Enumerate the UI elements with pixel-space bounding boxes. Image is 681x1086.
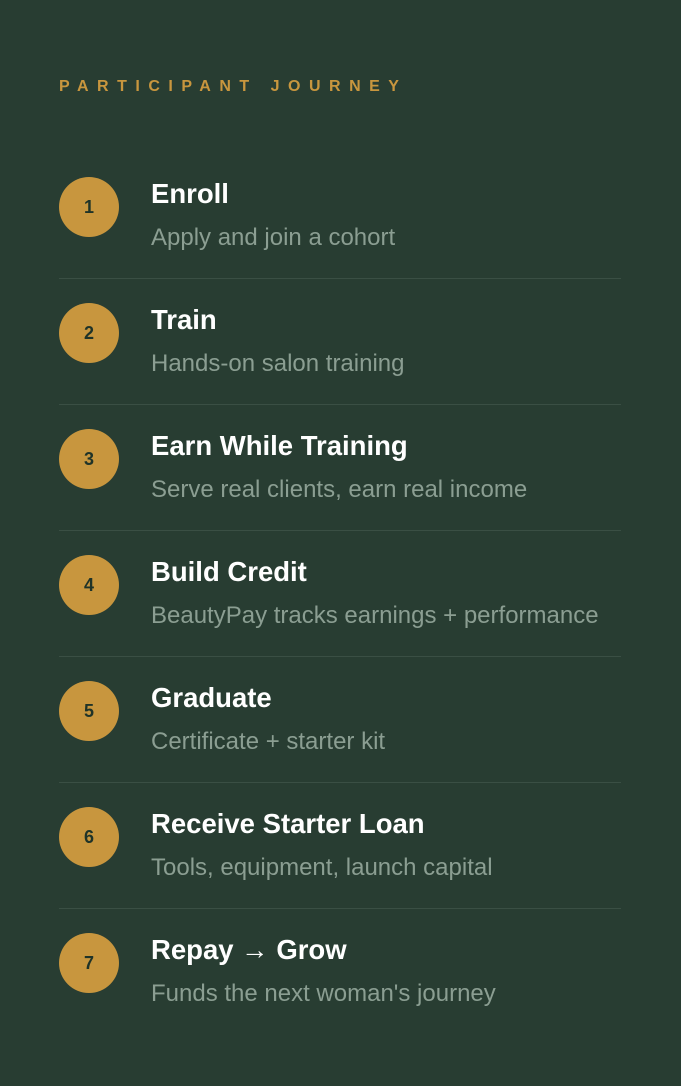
step 6: receive starter loan <box>59 807 493 881</box>
icon: number 3 <box>59 429 119 489</box>
icon: number 7: 7 <box>84 953 94 973</box>
step 3 description: Serve real clients, earn real income <box>151 476 527 503</box>
icon: number 7 <box>59 933 119 993</box>
icon: number 5 <box>59 681 119 741</box>
step 4 description: BeautyPay tracks earnings + performance <box>151 602 599 629</box>
step 6 description: Tools, equipment, launch capital <box>151 854 493 881</box>
icon: number 1: 1 <box>84 197 94 217</box>
icon: number 2 <box>59 303 119 363</box>
icon: number 6: 6 <box>84 827 94 847</box>
icon: number 4: 4 <box>84 575 94 595</box>
step 3 heading: Earn While Training <box>151 430 408 461</box>
icon: number 1 <box>59 177 119 237</box>
step 5 description: Certificate + starter kit <box>151 728 385 755</box>
step 4: build credit <box>59 555 599 629</box>
step 2 description: Hands-on salon training <box>151 350 404 377</box>
step 7: repay grow <box>59 933 496 1007</box>
icon: number 3: 3 <box>84 449 94 469</box>
step 1 description: Apply and join a cohort <box>151 224 395 251</box>
step 6 heading: Receive Starter Loan <box>151 808 425 839</box>
icon: number 5: 5 <box>84 701 94 721</box>
step 1: enroll <box>59 177 395 251</box>
step 4 heading: Build Credit <box>151 556 307 587</box>
step 7 description: Funds the next woman's journey <box>151 980 496 1007</box>
step 5 heading: Graduate <box>151 682 272 713</box>
icon: number 2: 2 <box>84 323 94 343</box>
icon: number 6 <box>59 807 119 867</box>
step 3: earn while training <box>59 429 527 503</box>
step 2 heading: Train <box>151 304 217 335</box>
step 1 heading: Enroll <box>151 178 229 209</box>
step 2: train <box>59 303 404 377</box>
step 5: graduate <box>59 681 385 755</box>
step 7 heading: Repay → Grow <box>151 934 347 965</box>
icon: number 4 <box>59 555 119 615</box>
title: PARTICIPANT JOURNEY <box>59 78 407 95</box>
